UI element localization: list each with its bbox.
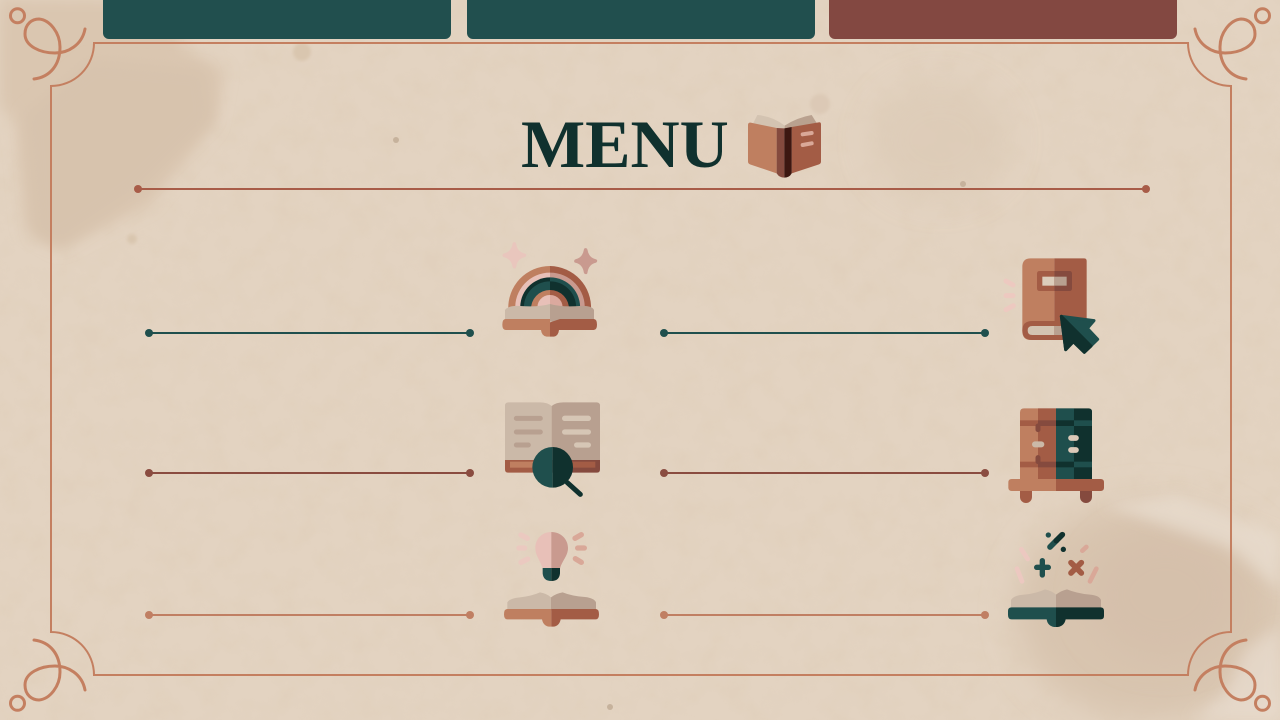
tab: top right [829, 0, 1177, 39]
title: MENU [521, 106, 729, 182]
icon part: book [502, 304, 597, 337]
icon part: motion dashes [1006, 281, 1013, 310]
icon part: bulb [535, 532, 568, 581]
icon part: sparks [1017, 549, 1028, 581]
icon part: shelf [1008, 479, 1104, 503]
icon part: rays [519, 535, 528, 562]
icon: books on a shelf [1008, 408, 1104, 503]
corner flourish: top left [10, 9, 85, 79]
icon part: magnifier [532, 447, 580, 494]
icon: title open book [748, 115, 821, 178]
title divider [134, 185, 1150, 193]
icon: open book with magnifier [505, 402, 600, 494]
icon part: book [504, 592, 599, 627]
icon part: book [1008, 589, 1104, 627]
corner flourish: bottom left [10, 640, 85, 710]
icon part: times sign [1071, 563, 1081, 573]
corner flourish: top right [1195, 9, 1270, 79]
divider: row 3 left [145, 611, 474, 619]
divider: row 2 left [145, 469, 474, 477]
icon part: book cover [1022, 258, 1087, 340]
divider: row 3 right [660, 611, 989, 619]
tab: top middle [467, 0, 815, 39]
icon part: cursor arrow [1061, 316, 1098, 352]
icon part: percent sign [1046, 532, 1066, 552]
divider: row 1 right [660, 329, 989, 337]
icon part: brown book [1020, 408, 1056, 479]
divider: row 1 left [145, 329, 474, 337]
icon: light bulb over open book [504, 532, 599, 627]
icon: math symbols over open book [1008, 532, 1104, 627]
corner flourish: bottom right [1195, 640, 1270, 710]
icon: rainbow over open book [502, 244, 597, 337]
icon part: teal book [1056, 408, 1092, 479]
icon: book with cursor [1006, 258, 1098, 352]
divider: row 2 right [660, 469, 989, 477]
icon part: plus sign [1037, 561, 1048, 575]
tab: top left [103, 0, 451, 39]
icon part: sparkles [504, 244, 595, 272]
icon part: rainbow arcs [508, 266, 591, 310]
